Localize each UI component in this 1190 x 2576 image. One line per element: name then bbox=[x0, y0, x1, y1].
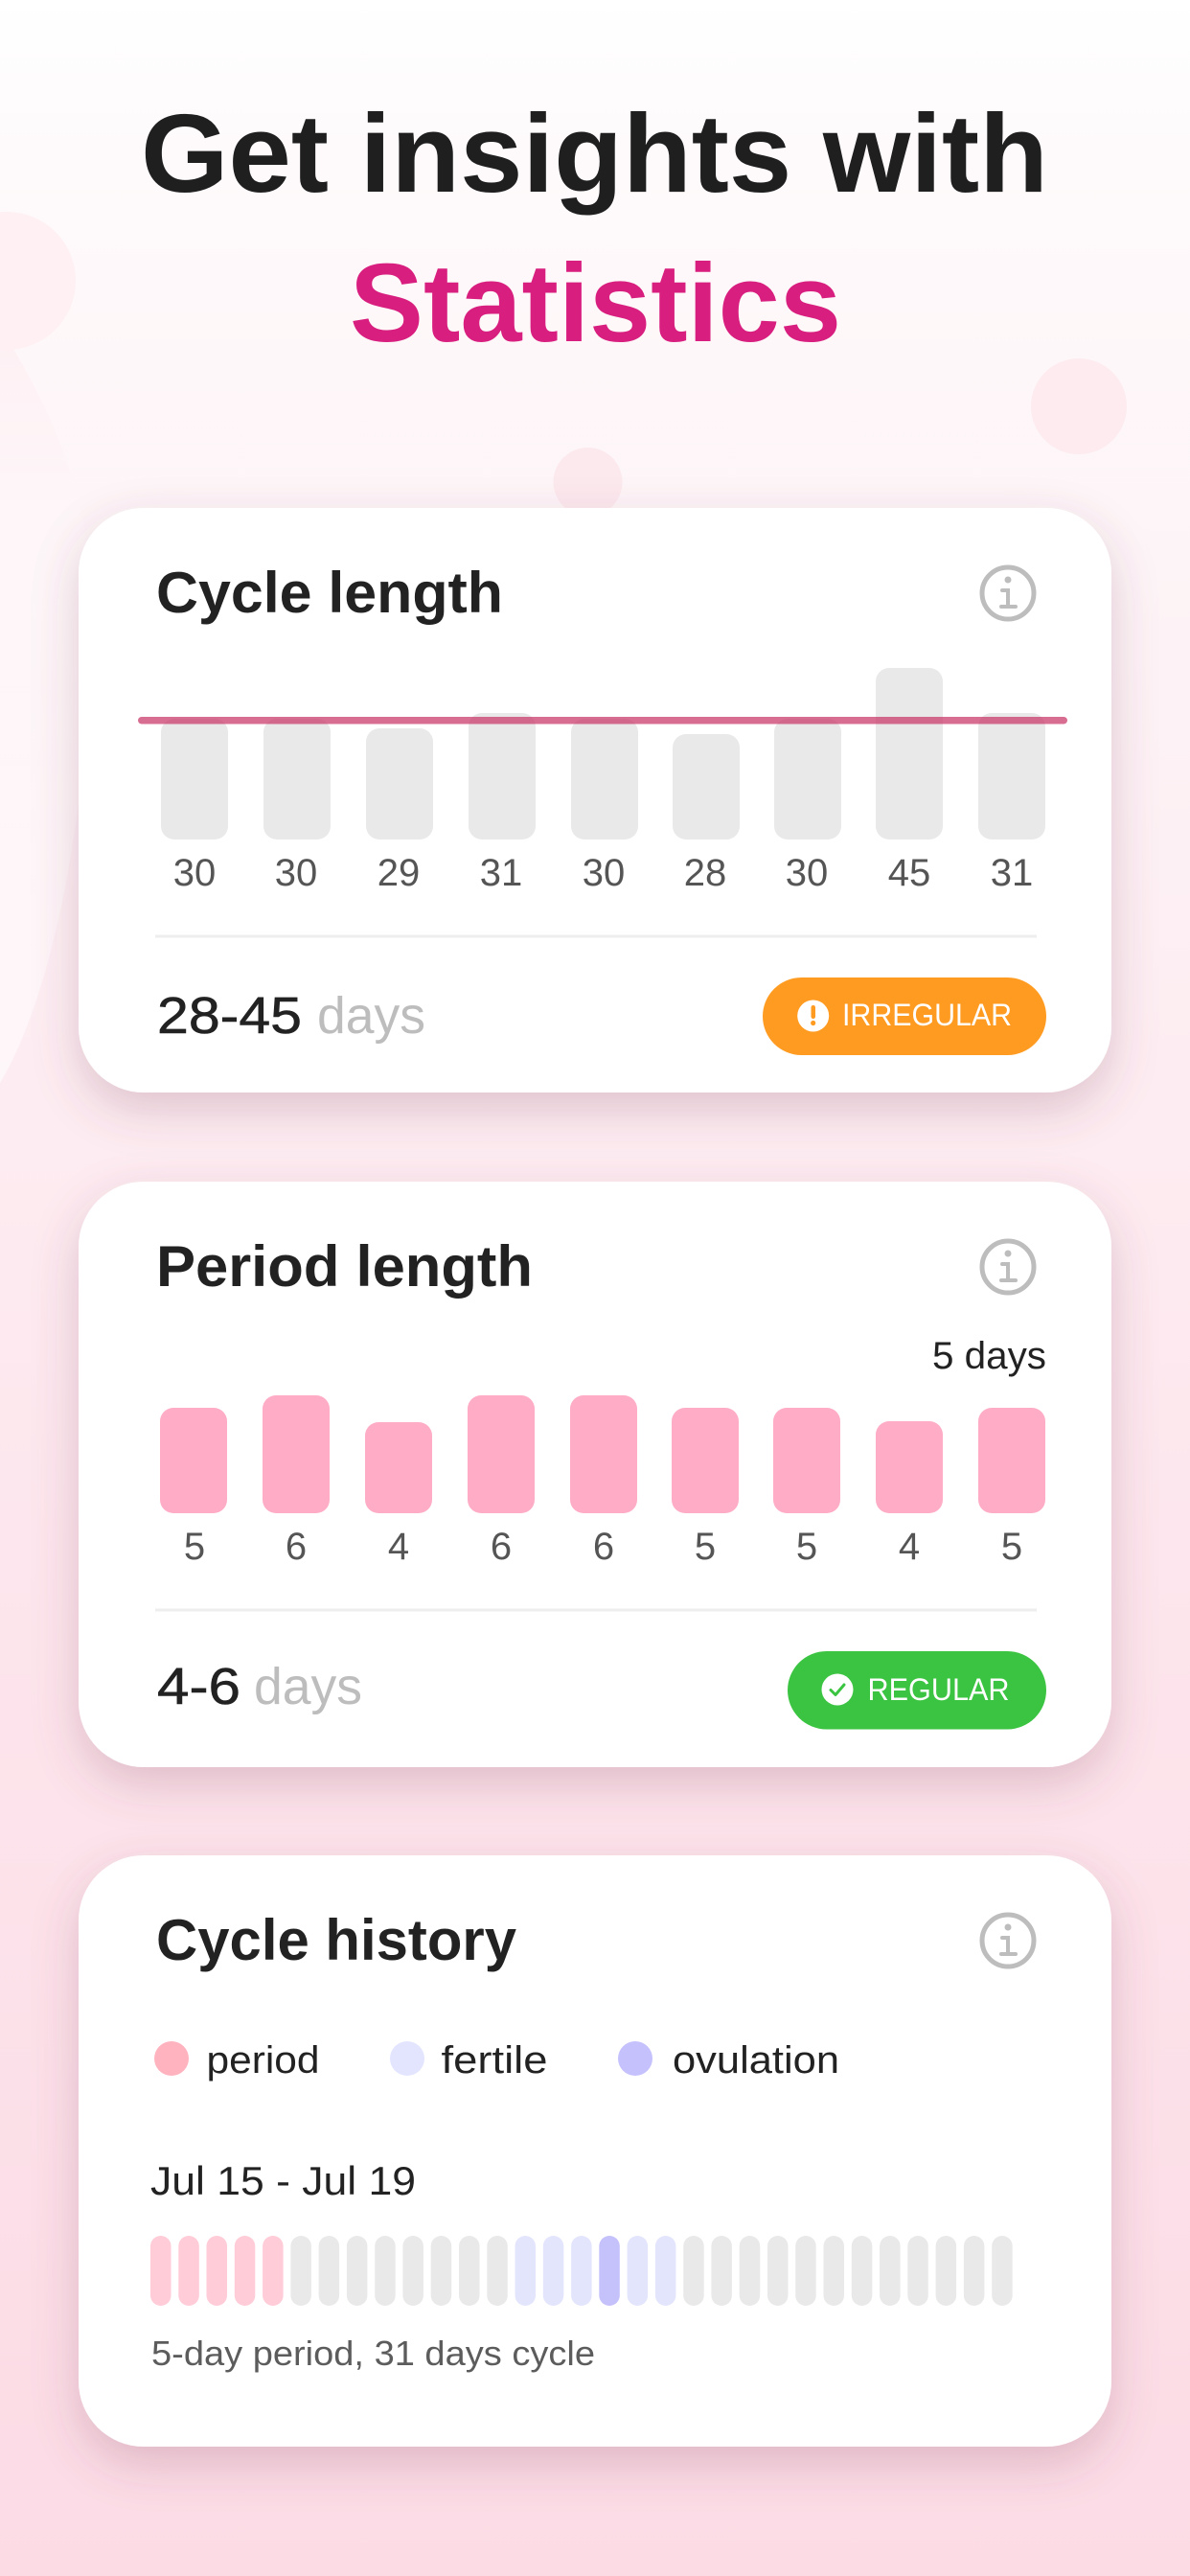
range text: 28-45 bbox=[157, 987, 302, 1045]
range text: 4-6 bbox=[157, 1658, 240, 1715]
range text: days bbox=[317, 987, 425, 1045]
icon: info bbox=[982, 1241, 1034, 1293]
legend: period bbox=[207, 2039, 320, 2082]
bar chart: cycle length: 45 bbox=[888, 852, 930, 894]
legend: fertile bbox=[441, 2039, 548, 2082]
date range: Jul 15 - Jul 19 bbox=[150, 2158, 416, 2203]
icon: info bbox=[982, 1915, 1034, 1966]
decorative background shapes bbox=[0, 212, 1127, 1083]
bar chart: period length: 5 bbox=[1001, 1526, 1022, 1568]
bar chart: cycle length: 30 bbox=[583, 852, 625, 894]
bar chart: cycle length: 31 bbox=[991, 852, 1033, 894]
panel: cycle history bbox=[79, 1855, 1111, 2447]
bar chart: period length: 6 bbox=[286, 1526, 307, 1568]
range text bbox=[157, 987, 425, 1045]
bar chart: period length: 6 bbox=[491, 1526, 512, 1568]
bar chart: cycle length: 31 bbox=[480, 852, 522, 894]
bar chart: period length bbox=[160, 1395, 1045, 1568]
bar chart: period length: 6 bbox=[593, 1526, 614, 1568]
bar chart: cycle length: 29 bbox=[378, 852, 420, 894]
panel: cycle length bbox=[79, 508, 1111, 1092]
badge: regular: REGULAR bbox=[868, 1672, 1010, 1707]
heading: cycle history: Cycle history bbox=[156, 1908, 517, 1972]
bar chart: cycle length bbox=[161, 668, 1045, 894]
panel: period length bbox=[79, 1182, 1111, 1767]
bar chart: period length: 5 bbox=[184, 1526, 205, 1568]
badge: irregular bbox=[763, 978, 1046, 1055]
average line bbox=[138, 717, 1067, 724]
badge: regular bbox=[788, 1651, 1046, 1729]
average label: 5 days bbox=[932, 1335, 1046, 1377]
title: Statistics bbox=[350, 241, 841, 365]
range text: days bbox=[254, 1658, 362, 1715]
bar chart: period length: 5 bbox=[695, 1526, 716, 1568]
icon: info bbox=[982, 567, 1034, 619]
bar chart: cycle length: 30 bbox=[275, 852, 317, 894]
title bbox=[141, 91, 1048, 365]
legend bbox=[154, 2039, 839, 2082]
title: Get insights with bbox=[141, 91, 1048, 216]
bar chart: period length: 5 bbox=[796, 1526, 817, 1568]
bar chart: period length: 4 bbox=[388, 1526, 409, 1568]
bar chart: period length: 4 bbox=[899, 1526, 920, 1568]
bar chart: cycle length: 30 bbox=[173, 852, 216, 894]
heading: period length: Period length bbox=[156, 1234, 533, 1299]
cycle day strip bbox=[150, 2236, 1013, 2306]
bar chart: cycle length: 30 bbox=[786, 852, 828, 894]
range text bbox=[157, 1658, 362, 1715]
bar chart: cycle length: 28 bbox=[684, 852, 726, 894]
caption: 5-day period, 31 days cycle bbox=[151, 2334, 595, 2373]
badge: irregular: IRREGULAR bbox=[842, 998, 1012, 1032]
heading: cycle length: Cycle length bbox=[156, 561, 503, 625]
legend: ovulation bbox=[673, 2039, 839, 2082]
